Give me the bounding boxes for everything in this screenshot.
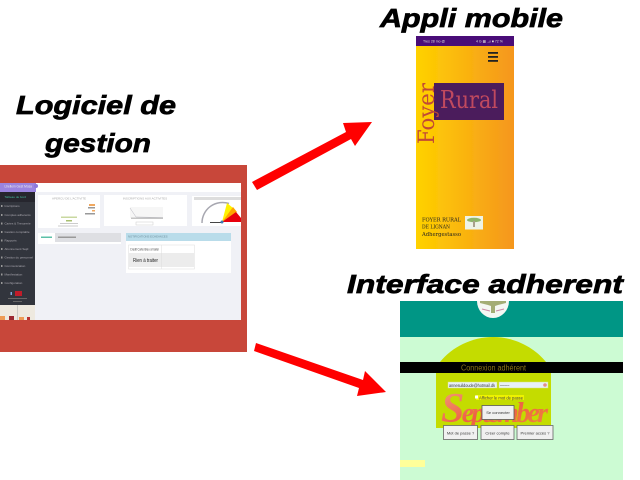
sidebar menu <box>0 183 38 320</box>
button: Créer compte <box>481 426 514 440</box>
title: Logiciel de gestion: gestion <box>44 128 151 158</box>
title: Appli mobile: Appli mobile <box>379 3 563 33</box>
card: notifications: NOTIFICATIONS ECHEANCES <box>128 234 168 238</box>
title: Logiciel de gestion: Logiciel de <box>16 90 176 120</box>
card: notifications <box>126 233 231 273</box>
panel: interface adherent screenshot <box>400 301 623 480</box>
panel: appli mobile screenshot <box>415 36 514 249</box>
input: password <box>499 382 548 388</box>
sidebar menu: Lhellem Gest Mosa <box>4 184 32 188</box>
icon: round logo <box>477 301 509 318</box>
sidebar menu: Inscriptions <box>4 204 20 208</box>
card: notifications: Credit Carte Bleu à traiter <box>130 248 160 252</box>
footer text: DE LIGNAN <box>422 224 450 230</box>
button: Mot de passe: Mot de passe ? <box>447 430 475 436</box>
footer text: FOYER RURAL <box>422 218 461 224</box>
sidebar menu: Rapports <box>4 238 17 242</box>
button: Premier accès <box>517 426 553 440</box>
panel: logiciel de gestion screenshot <box>0 165 247 352</box>
button: Mot de passe <box>444 426 478 440</box>
heading bar: Connexion adhérent <box>400 362 623 373</box>
title: Logiciel de gestion <box>16 90 176 158</box>
card: gauge <box>192 196 241 226</box>
panel: appli mobile screenshot: 4 G ▩ .⊿ ■ 72 % <box>476 40 503 44</box>
icon: hamburger menu <box>488 52 498 62</box>
sidebar menu: Cartes & Tresorerie <box>4 222 31 226</box>
logo box: Rural <box>434 83 504 120</box>
vertical word: Foyer: Foyer <box>415 83 440 144</box>
icon: tree logo <box>465 216 483 230</box>
sidebar menu: Communication <box>4 264 26 268</box>
sidebar menu: Gestion comptable <box>4 230 30 234</box>
checkbox: afficher le mot de passe: Afficher le mot de passe <box>479 396 523 400</box>
button: Premier accès: Premier accès ? <box>521 430 550 436</box>
title: Interface adherent: Interface adherent <box>347 269 625 299</box>
input: password: ••••••••• <box>500 384 509 388</box>
footer text: Adhergestasso <box>421 232 462 238</box>
card: inscriptions chart <box>104 195 187 226</box>
button: Créer compte: Créer compte <box>485 430 510 436</box>
sidebar menu: Configuration <box>4 281 23 285</box>
September lettering: September <box>441 386 549 432</box>
panel: appli mobile screenshot: Tres 28 mo @ <box>423 40 446 44</box>
card: aperçu de l'activité: APERCU DE L'ACTIVITE <box>52 196 86 200</box>
lime semicircle and form panel <box>436 337 551 432</box>
logo box: Rural: Rural <box>440 86 498 114</box>
sidebar menu: Abonnement Sejd <box>4 247 29 251</box>
footer text <box>421 218 462 238</box>
card: aperçu de l'activité <box>38 195 100 228</box>
button: Se connecter <box>482 406 514 420</box>
arrow: to Appli mobile <box>252 122 372 190</box>
card: inscriptions chart: INSCRIPTIONS AUX ACTIVITES <box>123 196 167 200</box>
sidebar menu: Gestion du personnel <box>4 256 33 260</box>
button: Se connecter: Se connecter <box>486 410 510 415</box>
card: notifications: Rien à traiter <box>133 258 158 264</box>
input: email: annesuildoude@hotmail.dk <box>449 383 496 388</box>
sidebar menu: Manifestation <box>4 272 23 276</box>
yellow note <box>400 460 425 467</box>
heading bar: Connexion adhérent: Connexion adhérent <box>461 364 527 372</box>
tabs panel <box>38 233 121 244</box>
sidebar menu: Comptes adherents <box>4 213 31 217</box>
arrow: to Interface adherent <box>254 343 386 396</box>
sidebar menu: Tableau de bord <box>4 195 26 199</box>
